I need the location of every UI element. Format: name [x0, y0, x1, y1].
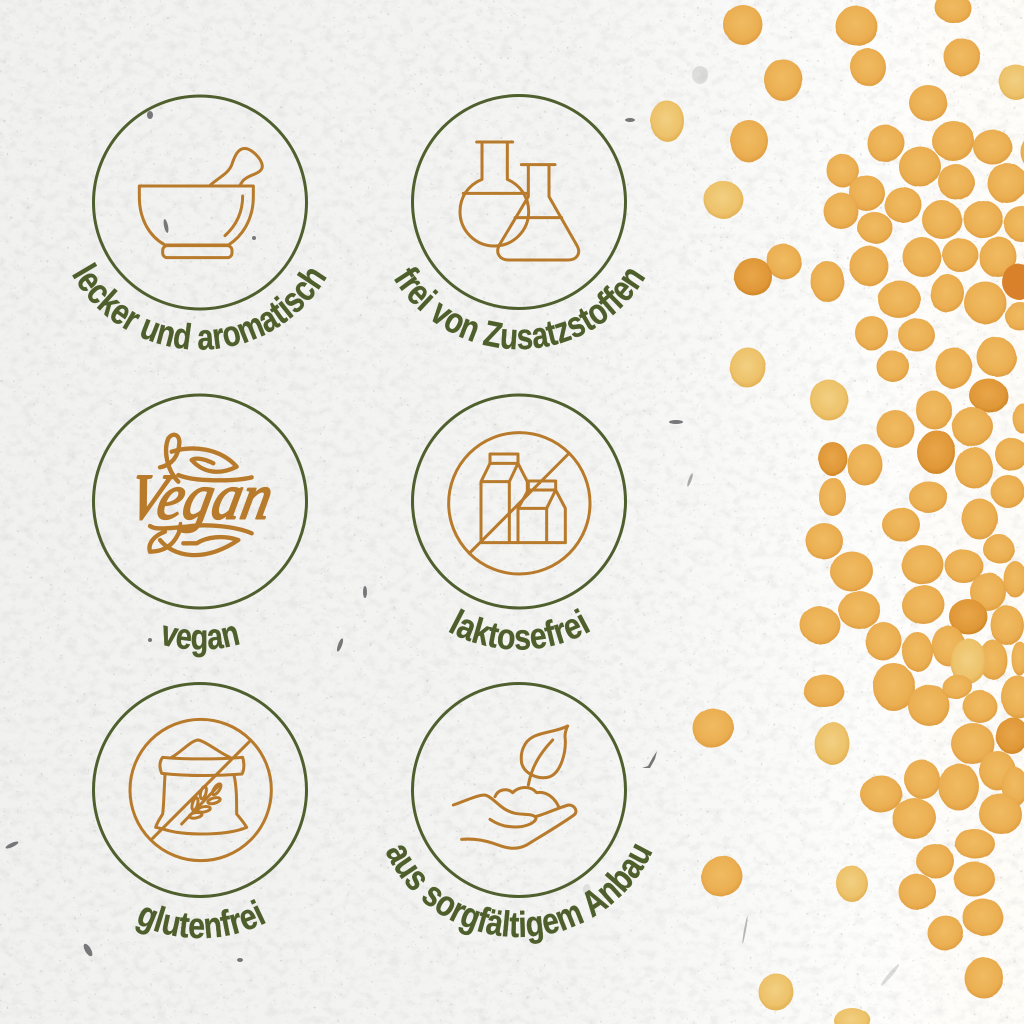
- icon: vegan script logo with leaves: Vegan: [122, 461, 279, 533]
- panel: frei von Zusatzstoffen: [394, 94, 646, 350]
- label: lecker und aromatisch: lecker und aromatisch: [72, 262, 327, 350]
- icon: vegan script logo with leaves: [122, 435, 279, 555]
- label: glutenfrei: glutenfrei: [135, 899, 266, 938]
- label: frei von Zusatzstoffen: frei von Zusatzstoffen: [394, 267, 646, 350]
- panel: lecker und aromatisch: [72, 94, 327, 350]
- icon: mortar and pestle: [139, 148, 262, 258]
- icon: hand holding soil and seedling: [453, 726, 576, 848]
- label: aus sorgfältigem Anbau: aus sorgfältigem Anbau: [386, 844, 652, 944]
- panel: laktosefrei: [411, 394, 627, 650]
- label: vegan: vegan: [163, 625, 240, 658]
- icon: crossed-out flour sack with wheat: [130, 719, 271, 861]
- panel: vegan: [92, 394, 308, 658]
- icon: laboratory flasks: [460, 142, 579, 260]
- label: laktosefrei: laktosefrei: [448, 608, 590, 650]
- icon: crossed-out milk cartons: [449, 433, 590, 574]
- panel: glutenfrei: [92, 682, 308, 938]
- panel: aus sorgfältigem Anbau: [386, 682, 652, 944]
- lentils scattered on the right: [650, 0, 1024, 1024]
